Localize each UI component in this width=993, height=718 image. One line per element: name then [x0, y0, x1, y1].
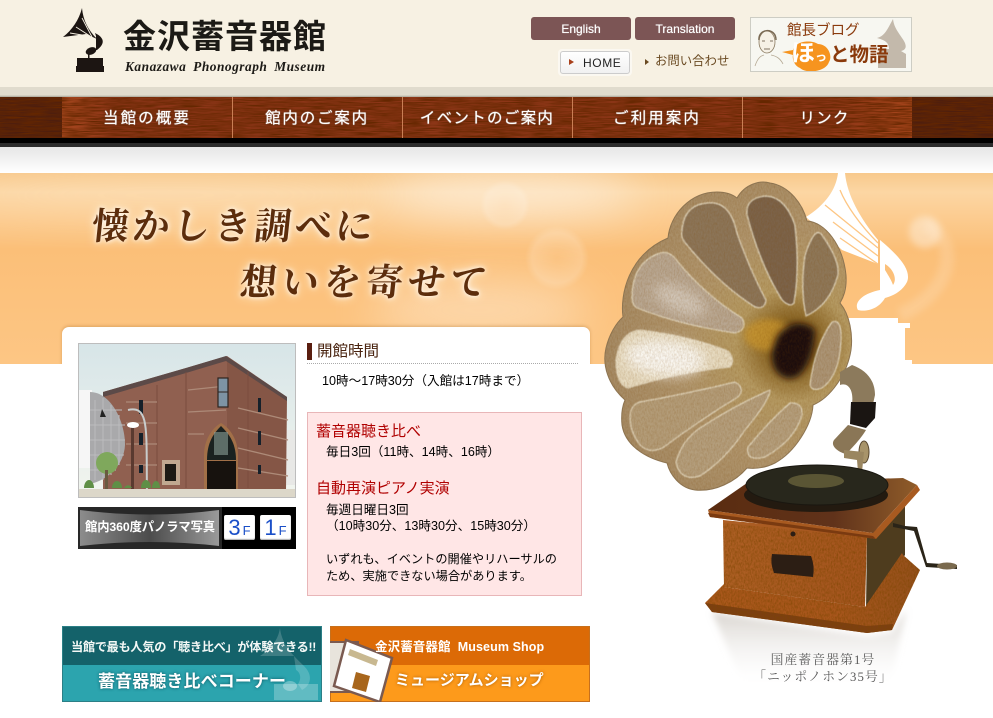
nav: events: イベントのご案内: [420, 110, 554, 127]
text: notice: ため、実施できない場合があります。: [326, 569, 532, 583]
icon: blog illustration: [754, 19, 906, 71]
shop tagline: 金沢蓄音器館 Museum Shop: [375, 640, 544, 654]
logo: [63, 8, 327, 74]
heading: player piano: 自動再演ピアノ実演: [316, 480, 450, 497]
text: piano schedule: [326, 503, 536, 533]
banner: museum shop: [330, 626, 590, 702]
logo wordmark: 金沢蓄音器館: [123, 18, 327, 55]
panorama links: [78, 507, 296, 549]
navigation bar: [0, 97, 993, 147]
button: Translation: [635, 17, 735, 40]
panorama label: 館内360度パノラマ写真: [85, 520, 215, 534]
text: notice: いずれも、イベントの開催やリハーサルの: [326, 552, 557, 566]
button: home: [558, 49, 632, 76]
blog title: 館長ブログ: [787, 23, 860, 39]
nav: links: リンク: [799, 110, 850, 127]
photo: museum building: [78, 343, 296, 498]
caption: [753, 652, 893, 684]
opening hours: [307, 343, 578, 388]
icon: shop catalogue: [330, 638, 394, 702]
hero title: [90, 204, 494, 304]
panorama label: [78, 507, 222, 549]
title line 1: 懐かしき調べに: [90, 207, 378, 248]
button: English: English: [561, 22, 601, 36]
text: piano schedule: （10時30分、13時30分、15時30分）: [326, 519, 536, 533]
text: listening schedule: 毎日3回（11時、14時、16時）: [326, 445, 500, 459]
logo english name: Kanazawa Phonograph Museum: [125, 59, 326, 74]
banner: director blog: [750, 17, 912, 72]
text: piano schedule: 毎週日曜日3回: [326, 503, 409, 517]
button: English: [531, 17, 631, 40]
button: 1F: 1F: [264, 515, 287, 540]
icon: tone arm: [833, 365, 876, 472]
hero background: [0, 173, 993, 658]
nav: guide: 館内のご案内: [265, 110, 369, 127]
button: Translation: Translation: [656, 22, 714, 36]
icon: faint gramophone: [260, 628, 318, 700]
icon: gramophone logo: [63, 8, 104, 72]
button: home: HOME: [583, 56, 621, 70]
hours text: 10時〜17時30分（入館は17時まで）: [322, 374, 529, 388]
nav: usage: ご利用案内: [613, 110, 701, 127]
button: 3F: 3F: [228, 515, 251, 540]
header band: [0, 0, 993, 97]
icon: white gramophone silhouette: [806, 173, 912, 364]
caption: 「ニッポノホン35号」: [753, 670, 893, 684]
schedule box: [307, 412, 582, 596]
blog name: ほっと物語: [791, 40, 889, 67]
title line 2: 想いを寄せて: [238, 263, 494, 304]
banner title: 蓄音器聴き比べコーナー: [98, 672, 286, 691]
text: notice: [326, 552, 557, 583]
nav: about: 当館の概要: [103, 110, 191, 127]
banner tagline: 当館で最も人気の「聴き比べ」が体験できる!!: [71, 640, 316, 654]
info panel: [61, 324, 591, 364]
icon: brass horn: [600, 180, 855, 492]
hours heading: 開館時間: [317, 343, 379, 360]
shadow under nav: [0, 147, 993, 173]
icon: gramophone cabinet: [705, 464, 957, 658]
wood texture: [0, 97, 993, 147]
shop title: ミュージアムショップ: [395, 672, 544, 689]
hours heading: [307, 343, 578, 364]
caption: 国産蓄音器第1号: [771, 653, 875, 667]
heading: listening comparison: 蓄音器聴き比べ: [316, 423, 421, 440]
link: contact: お問い合わせ: [655, 54, 729, 68]
banner: listening corner: [62, 626, 322, 702]
